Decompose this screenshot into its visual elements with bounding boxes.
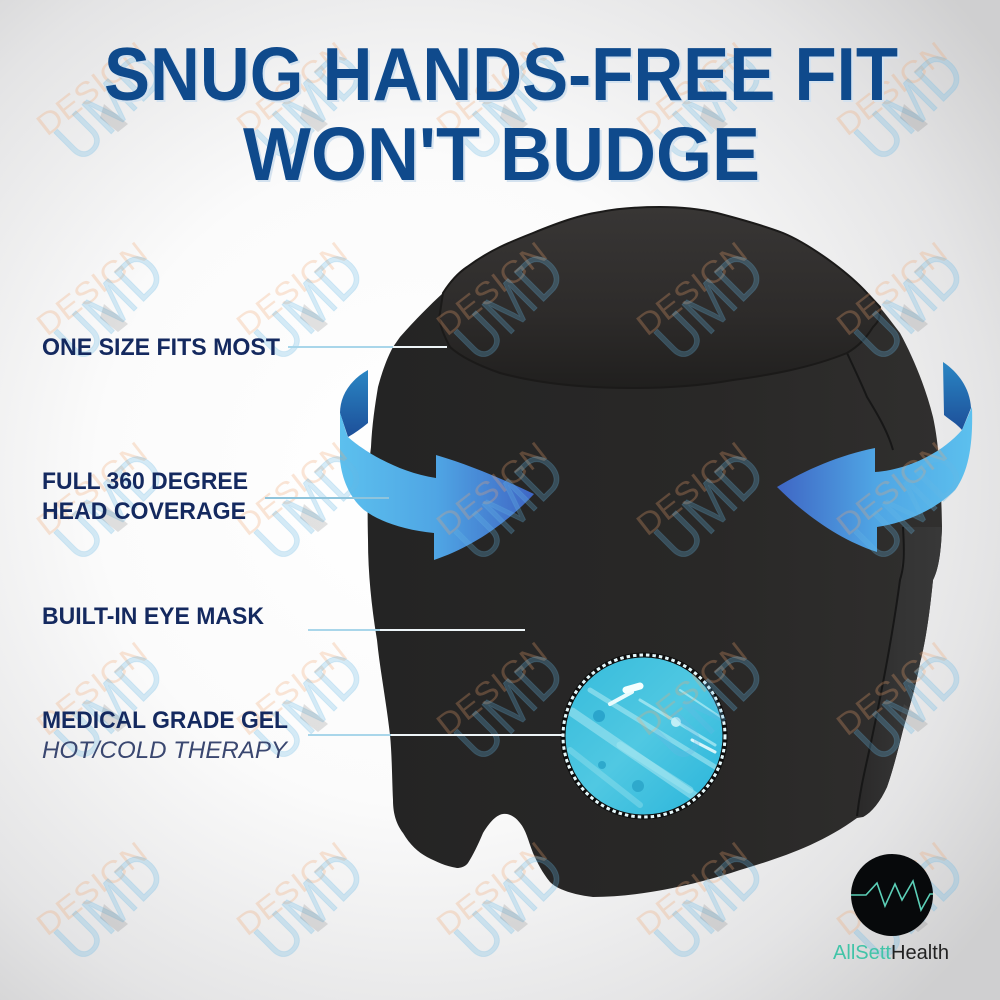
watermark pattern: DESIGN: [830, 635, 954, 743]
watermark pattern: DESIGN: [230, 435, 354, 543]
watermark pattern: UMD: [242, 438, 378, 574]
watermark pattern: DESIGN: [830, 835, 954, 943]
watermark pattern: DESIGN: [430, 235, 554, 343]
watermark pattern: DESIGN: [30, 835, 154, 943]
callout: coverage: [42, 468, 389, 525]
watermark pattern: DESIGN: [830, 435, 954, 543]
callout: eye mask: BUILT-IN EYE MASK: [42, 603, 265, 630]
logo: AllSettHealth: Health: [891, 942, 949, 964]
callout: one size: ONE SIZE FITS MOST: [42, 334, 280, 361]
watermark pattern: UMD: [242, 638, 378, 774]
title: [104, 32, 900, 198]
title: WON'T BUDGE: [243, 112, 760, 196]
watermark pattern: UMD: [442, 38, 578, 174]
callout: coverage: HEAD COVERAGE: [42, 498, 246, 525]
watermark pattern: UMD: [42, 638, 178, 774]
watermark pattern: DESIGN: [230, 235, 354, 343]
watermark pattern: DESIGN: [830, 235, 954, 343]
watermark pattern: DESIGN: [30, 35, 154, 143]
head wrap body: [368, 207, 942, 897]
watermark pattern: DESIGN: [30, 235, 154, 343]
watermark pattern: DESIGN: [30, 635, 154, 743]
watermark pattern: DESIGN: [430, 435, 554, 543]
arrow: left: [340, 370, 534, 560]
watermark pattern: UMD: [642, 838, 778, 974]
padded crown: [439, 207, 880, 388]
logo: AllSettHealth: AllSett: [833, 942, 891, 964]
watermark pattern: UMD: [642, 438, 778, 574]
watermark pattern: DESIGN: [430, 35, 554, 143]
logo: AllSettHealth: [833, 854, 949, 964]
watermark pattern: UMD: [42, 438, 178, 574]
watermark pattern: UMD: [242, 38, 378, 174]
watermark pattern: DESIGN: [830, 35, 954, 143]
watermark pattern: UMD: [42, 38, 178, 174]
watermark pattern: UMD: [642, 638, 778, 774]
watermark pattern: UMD: [842, 438, 978, 574]
watermark pattern: DESIGN: [230, 635, 354, 743]
arrow: right: [777, 362, 972, 552]
watermark pattern: UMD: [242, 238, 378, 374]
watermark pattern: UMD: [842, 238, 978, 374]
title: SNUG HANDS-FREE FIT: [106, 34, 900, 118]
watermark pattern: UMD: [642, 238, 778, 374]
watermark pattern: UMD: [442, 438, 578, 574]
callout: gel: MEDICAL GRADE GEL: [42, 707, 288, 734]
product: head wrap: [368, 207, 942, 897]
watermark pattern: DESIGN: [630, 435, 754, 543]
watermark pattern: DESIGN: [430, 635, 554, 743]
watermark pattern: UMD: [642, 38, 778, 174]
watermark pattern: UMD: [42, 838, 178, 974]
watermark pattern: UMD: [442, 838, 578, 974]
watermark pattern: UMD: [842, 838, 978, 974]
callout: gel: [42, 707, 564, 764]
watermark pattern: UMD: [442, 638, 578, 774]
watermark pattern: DESIGN: [630, 35, 754, 143]
watermark pattern: DESIGN: [630, 835, 754, 943]
right side band: [857, 527, 942, 817]
callout: coverage: FULL 360 DEGREE: [42, 468, 248, 495]
side seam: [847, 353, 904, 816]
gel sample circle: [563, 655, 725, 817]
watermark pattern: DESIGN: [430, 835, 554, 943]
watermark pattern: UMD: [842, 638, 978, 774]
watermark pattern: DESIGN: [630, 235, 754, 343]
watermark pattern: DESIGN: [630, 635, 754, 743]
watermark pattern: UMD: [242, 838, 378, 974]
watermark pattern: DESIGN: [230, 835, 354, 943]
watermark pattern: UMD: [442, 238, 578, 374]
watermark pattern: UMD: [842, 38, 978, 174]
watermark pattern: UMD: [42, 238, 178, 374]
watermark pattern: DESIGN: [230, 35, 354, 143]
watermark pattern: DESIGN: [30, 435, 154, 543]
title: SNUG HANDS-FREE FIT: [104, 32, 898, 116]
title: WON'T BUDGE: [245, 114, 762, 198]
callout: gel: HOT/COLD THERAPY: [42, 737, 289, 764]
